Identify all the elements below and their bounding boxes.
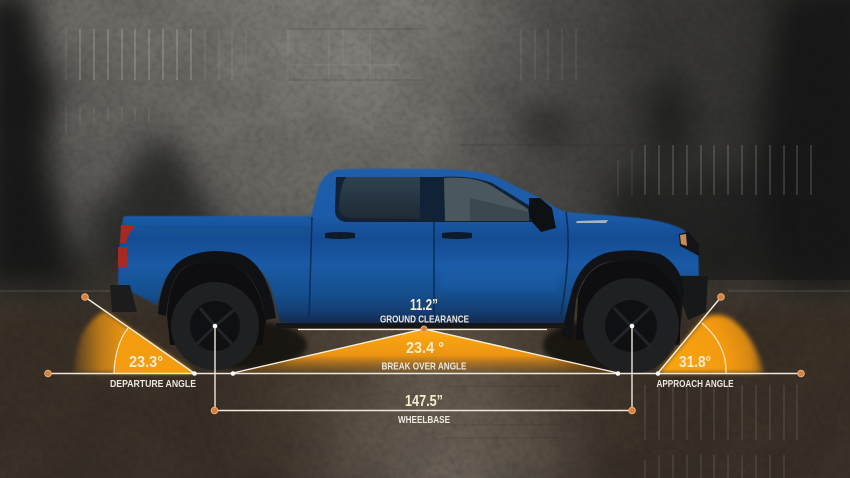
clearance label: GROUND CLEARANCE	[380, 314, 469, 326]
rear bumper	[110, 285, 137, 312]
tail lights	[118, 225, 135, 267]
clearance line	[298, 328, 547, 330]
wheel arch rear	[158, 251, 276, 320]
headlight	[679, 232, 699, 256]
side mirror	[529, 198, 556, 232]
bed highlight	[135, 226, 310, 236]
running board	[276, 323, 566, 328]
break over value: 23.4 °	[406, 340, 444, 357]
baseline	[48, 372, 801, 374]
departure arc	[114, 328, 128, 373]
rear wheel	[171, 282, 259, 370]
door lower highlight	[440, 262, 566, 290]
rear window	[339, 177, 420, 219]
approach fill	[658, 315, 764, 373]
door handles	[325, 232, 472, 239]
clearance value: 11.2”	[410, 297, 438, 314]
cab seam lines	[309, 212, 568, 318]
departure angle	[74, 297, 196, 390]
ground clearance	[298, 297, 547, 330]
departure core fill	[114, 328, 194, 373]
departure value: 23.3°	[129, 354, 163, 371]
break over label: BREAK OVER ANGLE	[382, 360, 466, 372]
truck	[110, 169, 708, 374]
truck body	[118, 169, 699, 324]
truck shadow: rear	[183, 321, 307, 369]
badge	[576, 220, 608, 223]
break over angle	[233, 329, 618, 373]
approach value: 31.8°	[679, 354, 711, 371]
approach angle	[656, 297, 764, 390]
break over fill	[233, 329, 618, 373]
front window	[444, 178, 529, 221]
wheelbase label: WHEELBASE	[398, 414, 450, 426]
markers	[45, 294, 804, 414]
approach label: APPROACH ANGLE	[656, 378, 734, 390]
approach line	[658, 297, 721, 373]
wheel arch front	[561, 250, 684, 340]
front bumper	[680, 276, 708, 320]
approach arc	[702, 323, 726, 373]
break over lines	[233, 329, 618, 373]
departure label: DEPARTURE ANGLE	[110, 378, 196, 390]
wheelbase value: 147.5”	[405, 393, 443, 410]
truck shadow: front	[543, 319, 667, 371]
departure fill	[74, 311, 194, 373]
departure line	[85, 297, 194, 373]
wheelbase bracket	[215, 326, 632, 410]
front wheel	[583, 278, 679, 374]
window frame	[335, 177, 533, 222]
wheelbase	[215, 326, 632, 426]
